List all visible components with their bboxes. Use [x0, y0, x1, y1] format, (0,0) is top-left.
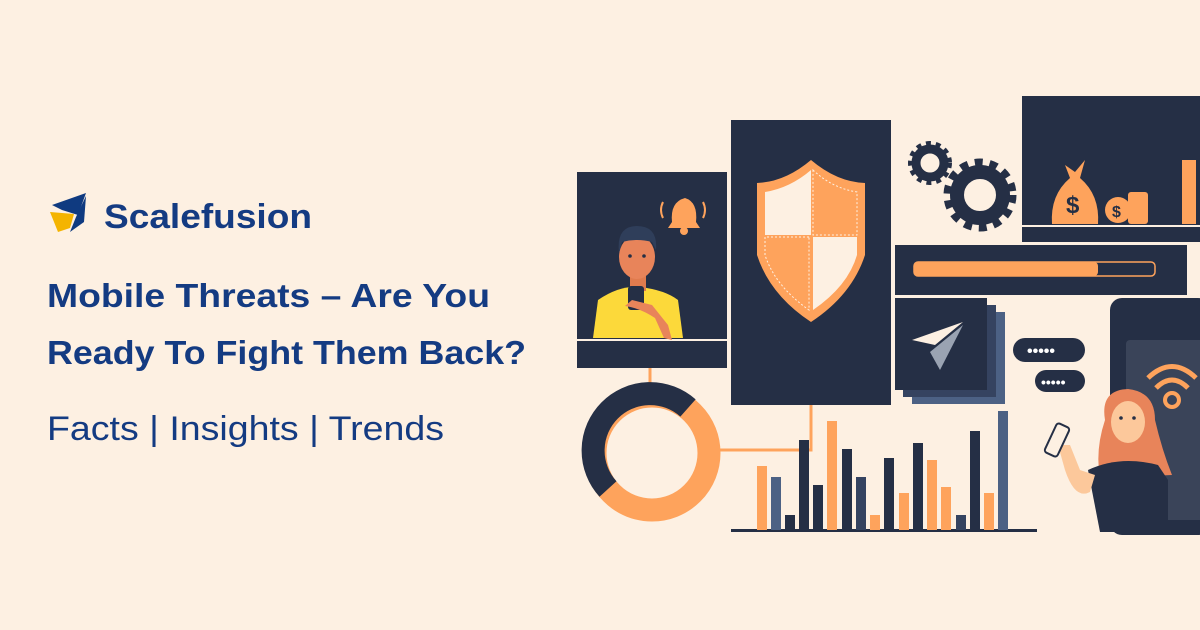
icon: money bag and coins: $: [1112, 204, 1121, 221]
phone with wifi: [1110, 298, 1200, 535]
icon: bell: [661, 198, 705, 235]
bar chart: [731, 411, 1037, 532]
subtitle: Facts | Insights | Trends: [47, 410, 444, 448]
chat bubbles: •••••: [1041, 374, 1066, 390]
man: [593, 226, 683, 340]
panel: man with phone: [577, 172, 727, 368]
title: [47, 277, 526, 371]
icon: money bag and coins: $: [1066, 192, 1080, 219]
title: Mobile Threats – Are You: [47, 277, 490, 314]
icon: shield: [757, 160, 865, 322]
brand name: Scalefusion: [104, 198, 312, 236]
logo: scalefusion: [50, 193, 312, 236]
panel: shield: [731, 120, 891, 405]
panel: progress bar: [895, 245, 1187, 295]
icon: logo mark: [50, 193, 86, 232]
chat bubbles: [1013, 338, 1085, 392]
panel: app logo cards: [895, 298, 1005, 404]
title: Ready To Fight Them Back?: [47, 334, 526, 371]
chat bubbles: •••••: [1027, 343, 1055, 360]
donut chart: [593, 394, 709, 510]
icon: money bag and coins: [1052, 160, 1196, 224]
panel: money: [1022, 96, 1200, 242]
icon: gears: [910, 143, 1013, 228]
connector lines: [650, 320, 811, 450]
woman with phone: [1044, 389, 1172, 532]
